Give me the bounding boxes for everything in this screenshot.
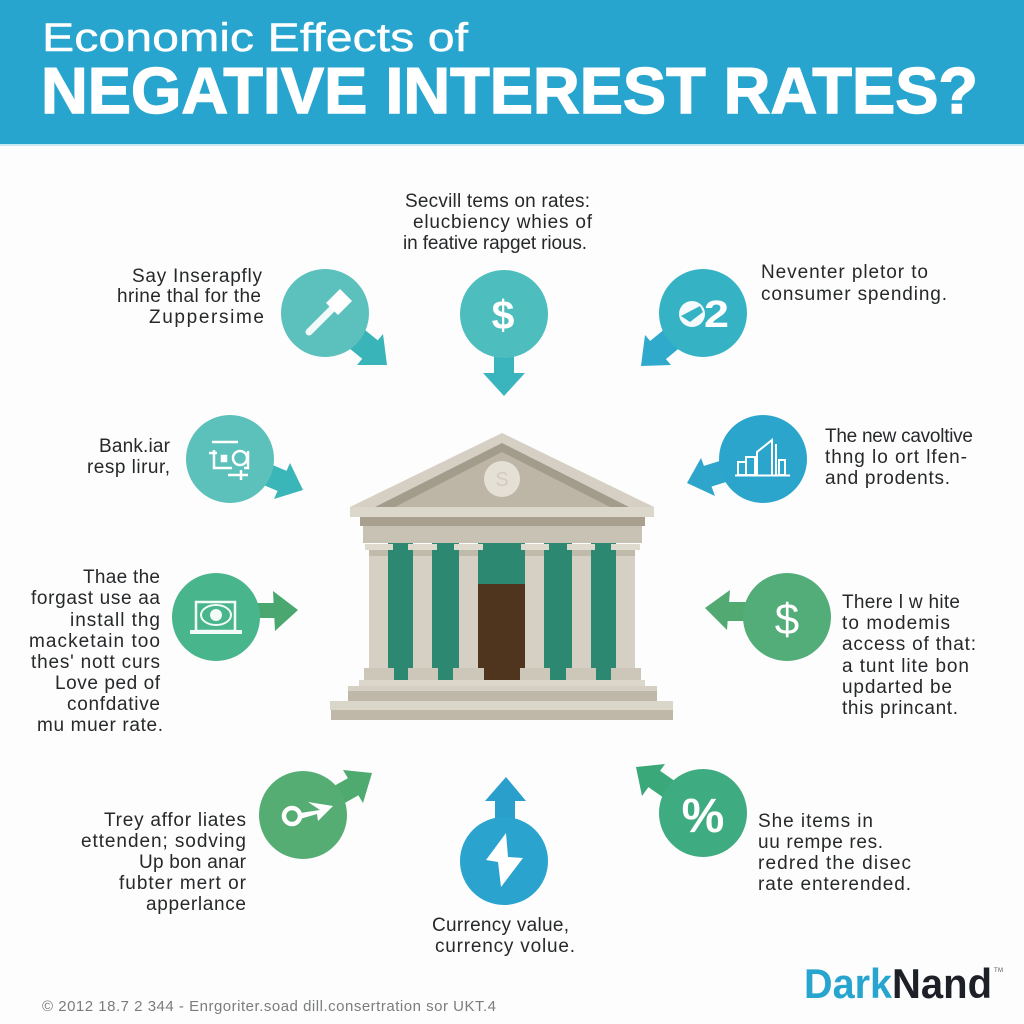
icon: banknote on laptop xyxy=(190,602,242,634)
arrow xyxy=(485,777,526,828)
logo: DarkNand: Dark xyxy=(804,960,893,1007)
text block: The new cavoltive xyxy=(825,426,973,447)
text block xyxy=(117,266,264,328)
callout: bottom left, key xyxy=(81,770,372,915)
footer copyright: © 2012 18.7 2 344 - Enrgoriter.soad dill.consertration sor UKT.4 xyxy=(42,998,496,1015)
callout: top centre, dollar xyxy=(403,191,593,396)
icon: process screen xyxy=(209,442,248,480)
logo: DarkNand xyxy=(804,960,1003,1007)
icon: lightning bolt xyxy=(486,833,523,887)
text block xyxy=(825,426,973,489)
text block: Currency value, xyxy=(432,915,569,936)
arrow xyxy=(483,350,525,396)
text block xyxy=(761,262,947,305)
text block: Say Inserapfly xyxy=(132,266,262,287)
text block: resp lirur, xyxy=(87,457,170,478)
callout: bottom centre, lightning xyxy=(432,777,575,957)
central bank building xyxy=(330,433,673,720)
text block: this princant. xyxy=(842,698,958,719)
callout: bottom right, percent xyxy=(636,764,911,895)
callout: top left, gavel xyxy=(117,266,387,365)
entablature xyxy=(350,507,654,543)
icon: percent: % xyxy=(682,790,724,843)
logo: DarkNand: TM xyxy=(994,968,1003,974)
steps xyxy=(330,680,673,720)
text block: mu muer rate. xyxy=(37,715,163,736)
title line 2: NEGATIVE INTEREST RATES? xyxy=(41,54,978,127)
text block: confdative xyxy=(67,694,160,715)
callout: lower right, dollar xyxy=(705,573,976,719)
pediment xyxy=(350,433,654,517)
text block: macketain too xyxy=(29,631,160,652)
text block: Thae the xyxy=(83,567,160,588)
text block: in feative rapget rious. xyxy=(403,233,587,254)
callout: middle left, bank process xyxy=(87,415,303,503)
text block: There l w hite xyxy=(842,592,960,613)
text block: forgast use aa xyxy=(31,588,160,609)
text block: hrine thal for the xyxy=(117,286,261,307)
arrow xyxy=(325,313,387,365)
text block xyxy=(87,436,171,478)
pediment: S xyxy=(495,469,509,491)
text block: Neventer pletor to xyxy=(761,262,928,283)
text block: to modemis xyxy=(842,613,950,634)
arrow xyxy=(641,313,703,366)
text block: Zuppersime xyxy=(149,307,264,328)
green wall panels xyxy=(388,543,616,680)
door xyxy=(478,584,525,680)
text block: install thg xyxy=(70,610,160,631)
text block xyxy=(81,810,247,915)
text block xyxy=(29,567,163,736)
icon: dollar: $ xyxy=(492,292,515,338)
text block: currency volue. xyxy=(435,936,575,957)
arrow xyxy=(705,590,756,630)
text block xyxy=(432,915,575,957)
text block: a tunt lite bon xyxy=(842,656,969,677)
text block: thes' nott curs xyxy=(31,652,160,673)
text block: Secvill tems on rates: xyxy=(405,191,590,212)
callout: middle right, bar chart xyxy=(687,415,973,503)
icon: key arrow xyxy=(284,802,333,824)
arrow xyxy=(303,770,372,815)
header banner xyxy=(0,0,1024,146)
callout: lower left, banknote xyxy=(29,567,298,736)
arrow xyxy=(230,459,303,499)
text block xyxy=(842,592,976,719)
arrow xyxy=(687,458,763,496)
icon: bar chart xyxy=(735,440,790,476)
text block: uu rempe res. xyxy=(758,832,883,853)
arrow xyxy=(636,764,703,813)
text block: and prodents. xyxy=(825,468,950,489)
text block: ettenden; sodving xyxy=(81,831,246,852)
logo: DarkNand: Nand xyxy=(892,960,992,1007)
text block: apperlance xyxy=(146,894,246,915)
icon: coin 2: 2 xyxy=(704,294,729,336)
icon: coin 2 xyxy=(679,294,729,336)
text block xyxy=(403,191,593,254)
text block: updarted be xyxy=(842,677,952,698)
text block: redred the disec xyxy=(758,853,911,874)
text block: Love ped of xyxy=(55,673,161,694)
text block xyxy=(758,811,911,895)
text block: fubter mert or xyxy=(119,873,247,894)
icon: dollar: $ xyxy=(775,595,799,644)
text block: Trey affor liates xyxy=(104,810,246,831)
text block: thng lo ort lfen- xyxy=(825,447,967,468)
title line 1: Economic Effects of xyxy=(42,16,469,60)
text block: elucbiency whies of xyxy=(413,212,593,233)
text block: Bank.iar xyxy=(99,436,171,457)
icon: gavel xyxy=(309,289,352,332)
text block: Up bon anar xyxy=(139,852,247,873)
arrow xyxy=(250,591,298,631)
columns xyxy=(364,544,641,680)
text block: rate enterended. xyxy=(758,874,911,895)
text block: access of that: xyxy=(842,634,976,655)
callout: top right, coin 2 xyxy=(641,262,947,366)
text block: She items in xyxy=(758,811,873,832)
text block: consumer spending. xyxy=(761,284,947,305)
